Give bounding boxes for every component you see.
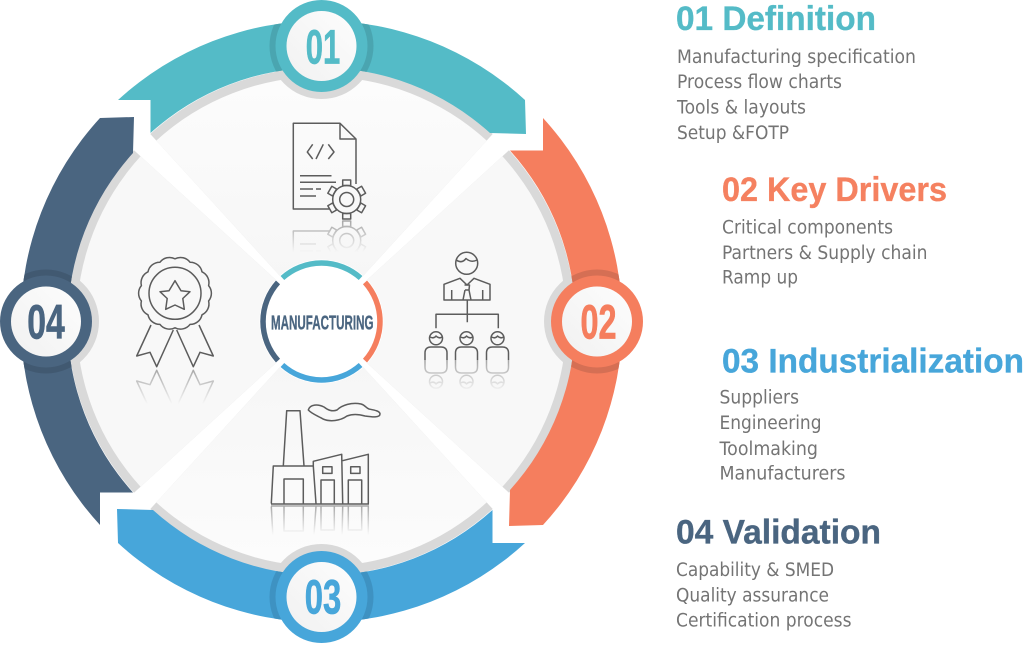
list: Key Drivers items: Partners & Supply chain: [722, 243, 928, 264]
list: Key Drivers items: Critical components: [722, 217, 893, 238]
icon: factory: [270, 402, 381, 532]
list: Validation items: Quality assurance: [676, 586, 829, 607]
list: Key Drivers items: Ramp up: [722, 267, 798, 288]
text block: 04 Validation: [676, 513, 881, 632]
sector: left, Validation: [68, 150, 322, 493]
badge: 03: 03: [305, 572, 341, 624]
badge: 01: 01: [306, 21, 340, 74]
list: Industrialization items: Engineering: [720, 413, 822, 434]
sector: right, Key Drivers: [322, 150, 575, 493]
heading: 02 Key Drivers: 02 Key Drivers: [722, 171, 947, 209]
arrow band: 03 blue: [117, 509, 525, 620]
badge: 04: [0, 276, 92, 368]
arrow band: 02 orange: [509, 118, 620, 526]
list: Definition items: Manufacturing specification: [677, 47, 916, 68]
list: Industrialization items: [719, 387, 846, 484]
badge halos on the inner side: [70, 70, 572, 572]
sector: top, Definition: [150, 68, 493, 322]
heading: 03 Industrialization: 03 Industrialization: [722, 342, 1024, 380]
arrow band: 04 navy: [23, 117, 134, 525]
list: Definition items: Tools & layouts: [676, 98, 806, 118]
list: Validation items: [676, 560, 852, 632]
list: Definition items: Process flow charts: [677, 72, 842, 93]
badge: 04: 04: [27, 296, 65, 350]
panel: central wheel: [68, 68, 575, 575]
icon: award rosette: [136, 256, 214, 400]
arrow band: 01 teal: [118, 23, 526, 134]
center hub: Manufacturing: MANUFACTURING: [271, 312, 374, 334]
badge: 01: [276, 0, 368, 92]
list: Industrialization items: Manufacturers: [720, 463, 846, 484]
heading: 04 Validation: 04 Validation: [676, 513, 881, 551]
list: Definition items: Setup &FOTP: [677, 123, 789, 144]
heading: 01 Definition: 01 Definition: [676, 0, 876, 38]
icon: organisation chart: [424, 252, 510, 389]
text block: 01 Definition: [676, 0, 916, 144]
text block: 02 Key Drivers: [722, 171, 947, 288]
list: Key Drivers items: [722, 217, 928, 288]
badge: 03: [276, 551, 368, 643]
list: Industrialization items: Toolmaking: [719, 439, 818, 460]
list: Definition items: [676, 47, 916, 144]
list: Validation items: Certification process: [676, 611, 852, 632]
list: Industrialization items: Suppliers: [720, 387, 799, 408]
list: Validation items: Capability & SMED: [676, 560, 834, 581]
icon: document with gear: [292, 122, 366, 249]
badge: 02: [551, 276, 643, 368]
sector: bottom, Industrialization: [150, 322, 493, 575]
text block: 03 Industrialization: [719, 342, 1024, 484]
center hub: Manufacturing: [260, 260, 384, 384]
badge: 02: 02: [580, 296, 616, 350]
